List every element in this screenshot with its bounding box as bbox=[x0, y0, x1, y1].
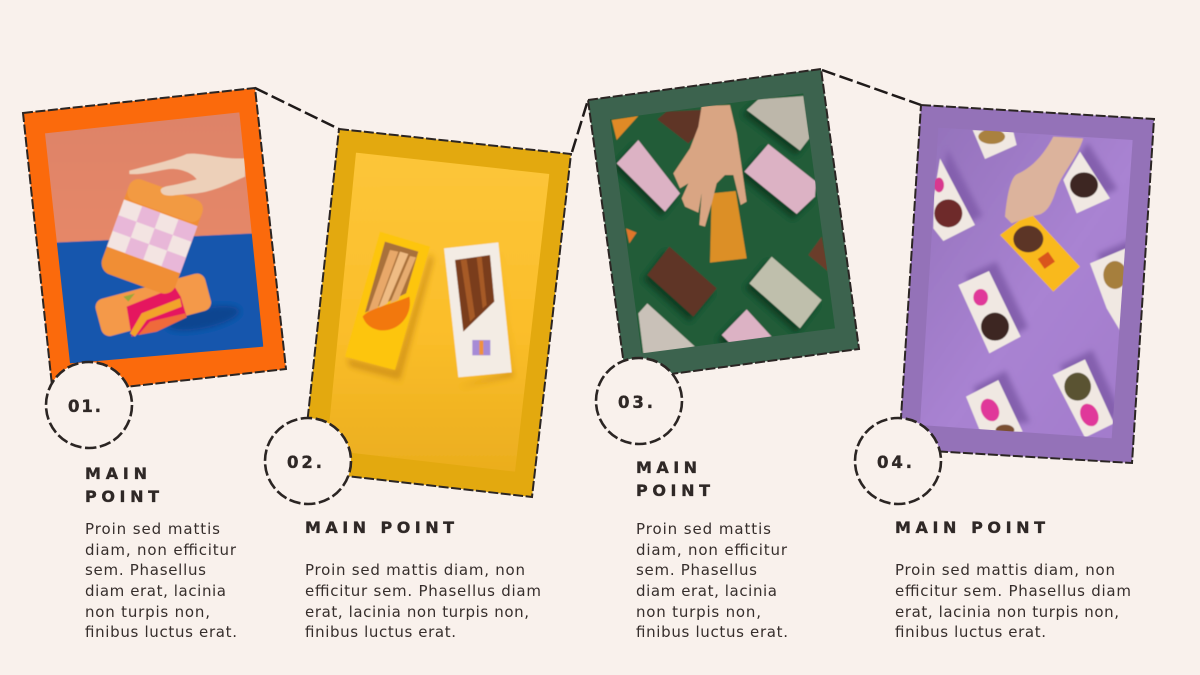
heading: step 1: POINT bbox=[85, 487, 159, 506]
text block: step 4: erat, lacinia non turpis non, bbox=[895, 603, 1119, 621]
text block: step 1: Proin sed mattis bbox=[85, 520, 220, 538]
text block: step 3: sem. Phasellus bbox=[636, 561, 757, 579]
panel 2 dashed border bbox=[302, 129, 571, 497]
text block: step 2 bbox=[305, 561, 541, 641]
photo: treat boxes on purple bbox=[917, 125, 1137, 442]
text block: step 4: Proin sed mattis diam, non bbox=[895, 561, 1115, 579]
number badge 03: 03. bbox=[618, 393, 653, 412]
text block: step 3: diam, non efficitur bbox=[636, 541, 788, 559]
photo: orange lunch boxes bbox=[40, 110, 270, 370]
text block: step 3: non turpis non, bbox=[636, 603, 761, 621]
panel 4 dashed border bbox=[899, 105, 1154, 463]
yellow frame bbox=[302, 129, 571, 497]
text block: step 2: efficitur sem. Phasellus diam bbox=[305, 582, 541, 600]
number badge 02 bbox=[265, 418, 351, 504]
heading: step 1: MAIN bbox=[85, 464, 147, 483]
text block: step 4 bbox=[895, 561, 1131, 641]
connector: panel 1 to panel 2 bbox=[255, 88, 339, 129]
orange frame bbox=[23, 88, 286, 395]
heading: step 4: MAIN POINT bbox=[895, 518, 1045, 537]
number badge 03 bbox=[596, 358, 682, 444]
text block: step 2: Proin sed mattis diam, non bbox=[305, 561, 525, 579]
text block: step 1: diam erat, lacinia bbox=[85, 582, 226, 600]
text block: step 1 bbox=[85, 520, 237, 641]
panel: step 2 photo frame bbox=[302, 129, 571, 497]
text block: step 4: finibus luctus erat. bbox=[895, 623, 1046, 641]
text block: step 1: non turpis non, bbox=[85, 603, 210, 621]
number badge 04 bbox=[855, 418, 941, 504]
purple frame bbox=[899, 105, 1154, 463]
panel 1 dashed border bbox=[23, 88, 286, 395]
connector: panel 2 to panel 3 bbox=[572, 100, 588, 152]
number badge 01: 01. bbox=[68, 397, 101, 416]
text block: step 3: finibus luctus erat. bbox=[636, 623, 788, 641]
text block: step 3: Proin sed mattis bbox=[636, 520, 771, 538]
heading: step 3: MAIN bbox=[636, 458, 697, 477]
text block: step 2: finibus luctus erat. bbox=[305, 623, 456, 641]
panel: step 3 photo frame bbox=[588, 69, 859, 380]
text block: step 1: finibus luctus erat. bbox=[85, 623, 237, 641]
green frame bbox=[588, 69, 859, 380]
photo: snack boxes on yellow bbox=[323, 150, 553, 477]
heading: step 2: MAIN POINT bbox=[305, 518, 454, 537]
panel 3 dashed border bbox=[588, 69, 859, 380]
connector: panel 3 to panel 4 bbox=[822, 70, 921, 105]
number badge 01 bbox=[46, 362, 132, 448]
photo: snack bars on green bbox=[607, 90, 840, 357]
text block: step 4: efficitur sem. Phasellus diam bbox=[895, 582, 1131, 600]
text block: step 1: diam, non efficitur bbox=[85, 541, 237, 559]
number badge 04: 04. bbox=[877, 453, 912, 472]
number badge 02: 02. bbox=[287, 453, 322, 472]
heading: step 3: POINT bbox=[636, 481, 710, 500]
text block: step 3: diam erat, lacinia bbox=[636, 582, 777, 600]
panel: step 4 photo frame bbox=[899, 105, 1154, 463]
text block: step 1: sem. Phasellus bbox=[85, 561, 206, 579]
heading: step 3 bbox=[636, 458, 710, 500]
text block: step 2: erat, lacinia non turpis non, bbox=[305, 603, 529, 621]
panel: step 1 photo frame bbox=[23, 88, 286, 395]
text block: step 3 bbox=[636, 520, 788, 641]
heading: step 1 bbox=[85, 464, 159, 506]
